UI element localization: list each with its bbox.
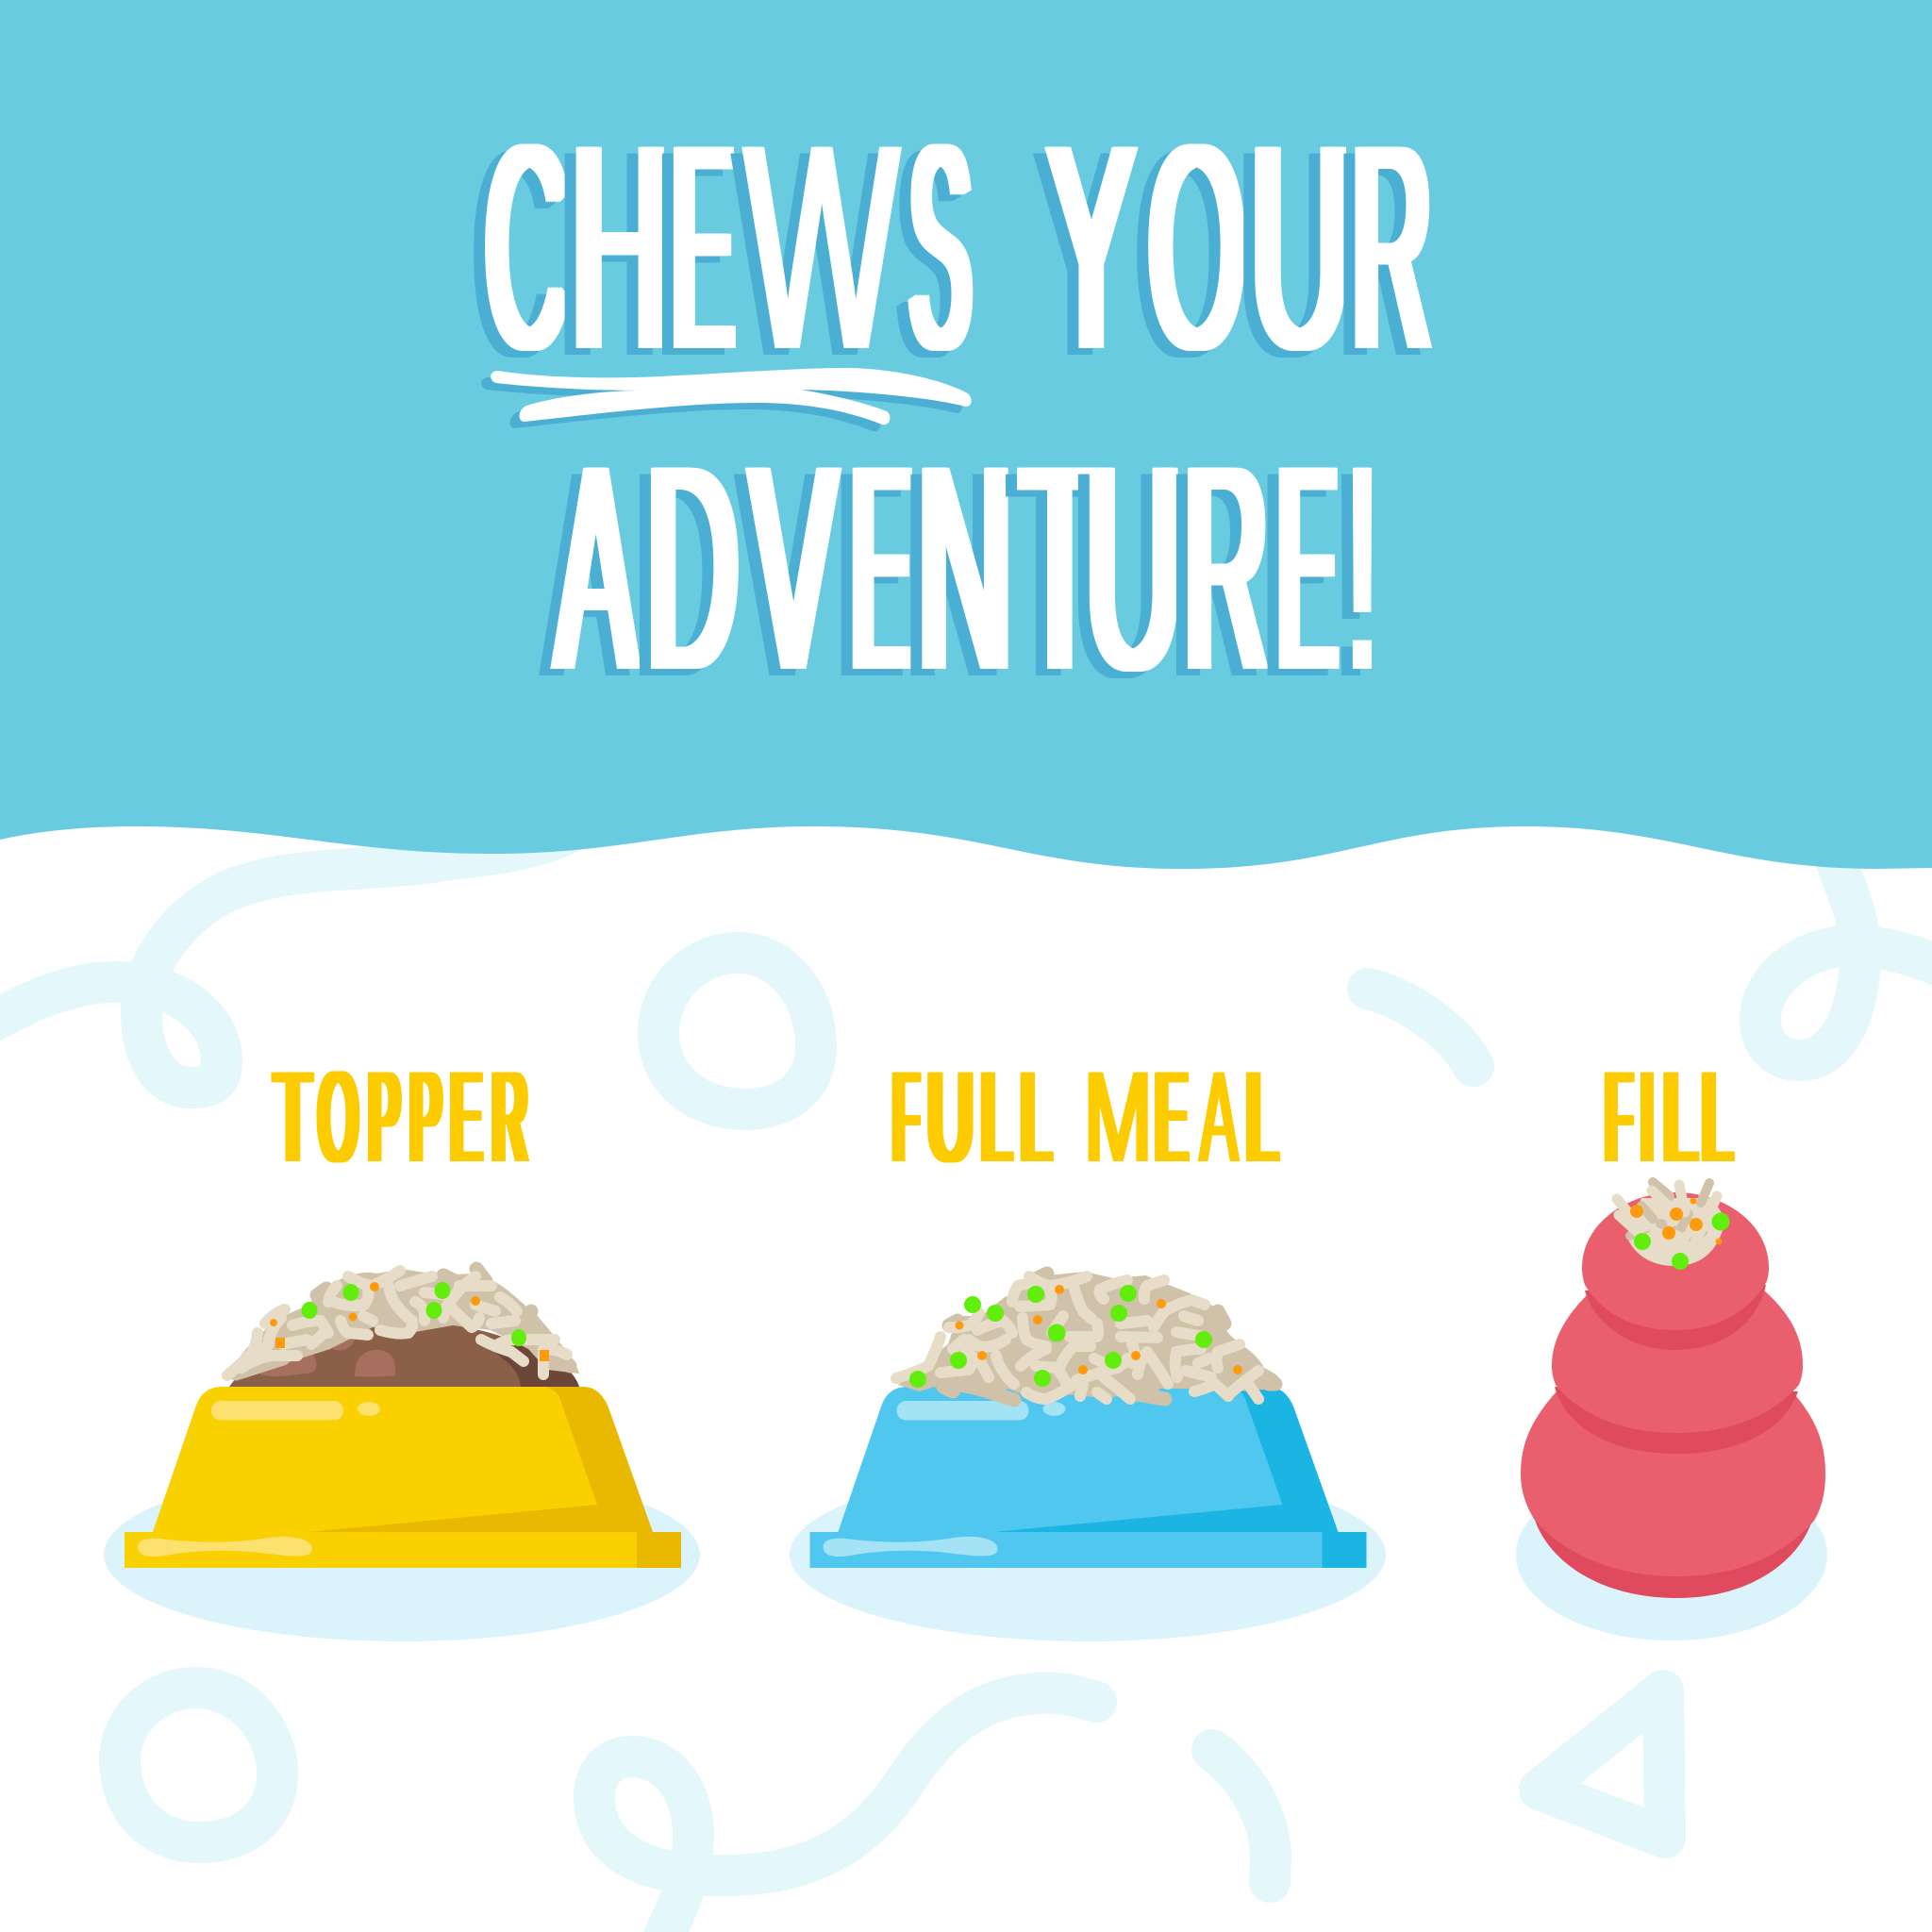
title line 1: Y	[1048, 83, 1135, 410]
title underline	[481, 368, 972, 431]
title line 1: R	[1353, 83, 1430, 410]
full meal: blue bowl with food	[790, 1272, 1386, 1641]
wavy header band	[0, 0, 1932, 869]
peas and carrots	[1630, 1198, 1730, 1270]
label: full meal	[892, 1045, 1281, 1190]
label: topper: P	[410, 1045, 441, 1190]
label: fill: L	[1663, 1045, 1696, 1190]
title line 2: E	[1278, 404, 1337, 731]
peas and carrots	[270, 1282, 549, 1361]
title line 1: E	[673, 83, 733, 410]
top tier	[1582, 1192, 1769, 1350]
rice in toy opening	[1617, 1182, 1725, 1266]
shadow: toy	[1516, 1469, 1827, 1641]
background squiggles	[0, 811, 1932, 1932]
title line 2: D	[647, 404, 738, 731]
shadow: topper	[104, 1468, 700, 1641]
label: fill	[1604, 1045, 1735, 1190]
shadow: full meal	[790, 1468, 1386, 1641]
title line 2: E	[852, 404, 911, 731]
title line 2: T	[1021, 404, 1099, 731]
label: full meal: F	[892, 1045, 918, 1190]
label: fill: L	[1702, 1045, 1732, 1190]
bottom tier	[1521, 1391, 1825, 1598]
label: topper	[271, 1045, 530, 1190]
title line 1: W	[744, 83, 899, 410]
title line 1: S	[910, 83, 970, 410]
title line 1	[474, 83, 1432, 410]
title line 2: U	[1086, 404, 1181, 731]
rice pile	[896, 1272, 1280, 1402]
rice topping	[226, 1269, 579, 1379]
title line 1: U	[1251, 83, 1351, 410]
title line 1: H	[572, 83, 669, 410]
title line 2: R	[1185, 404, 1267, 731]
label: topper: E	[451, 1045, 481, 1190]
title line 2: !	[1354, 404, 1371, 731]
blue bowl	[809, 1387, 1366, 1568]
title line 2: V	[751, 404, 837, 731]
label: topper: P	[369, 1045, 400, 1190]
label: full meal: L	[1021, 1045, 1051, 1190]
label: fill: F	[1606, 1045, 1632, 1190]
topper: yellow bowl with food	[104, 1269, 700, 1641]
title line 2: A	[557, 404, 635, 731]
title line 2: N	[918, 404, 1012, 731]
label: full meal: E	[1156, 1045, 1187, 1190]
label: topper: O	[319, 1045, 358, 1190]
label: full meal: A	[1200, 1045, 1239, 1190]
title line 1: O	[1149, 83, 1244, 410]
label: full meal: L	[981, 1045, 1011, 1190]
label: fill: I	[1641, 1045, 1653, 1190]
peas and carrots	[909, 1285, 1242, 1388]
label: full meal: M	[1084, 1045, 1153, 1190]
middle tier	[1552, 1291, 1803, 1454]
label: full meal: U	[927, 1045, 973, 1190]
label: full meal: L	[1246, 1045, 1277, 1190]
title line 1: C	[486, 83, 568, 410]
label: topper: T	[275, 1045, 310, 1190]
yellow bowl	[125, 1387, 681, 1568]
title	[474, 83, 1432, 731]
wet food mound	[229, 1321, 579, 1387]
fill: red toy with food	[1516, 1182, 1827, 1641]
label: topper: R	[492, 1045, 526, 1190]
title line 2	[539, 404, 1372, 731]
